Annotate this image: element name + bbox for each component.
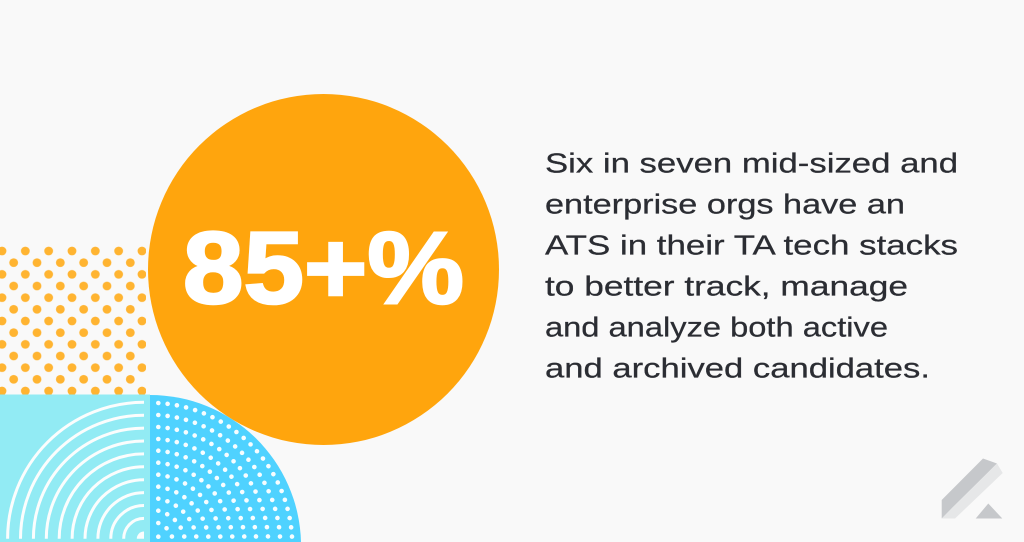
orange circle bbox=[148, 94, 499, 445]
blue dotted quarter circle bbox=[150, 395, 301, 542]
icon: logo bbox=[942, 458, 1003, 518]
headline stat: 85+% bbox=[183, 211, 464, 325]
description text: Six in seven mid-sized and bbox=[545, 148, 958, 179]
orange dot pattern bbox=[0, 246, 146, 395]
description text: and analyze both active bbox=[545, 312, 888, 343]
description text bbox=[545, 148, 958, 384]
description text: to better track, manage bbox=[545, 271, 908, 302]
description text: enterprise orgs have an bbox=[545, 189, 905, 220]
cyan panel with concentric arcs bbox=[0, 394, 150, 542]
description text: and archived candidates. bbox=[545, 353, 930, 384]
description text: ATS in their TA tech stacks bbox=[545, 230, 958, 261]
